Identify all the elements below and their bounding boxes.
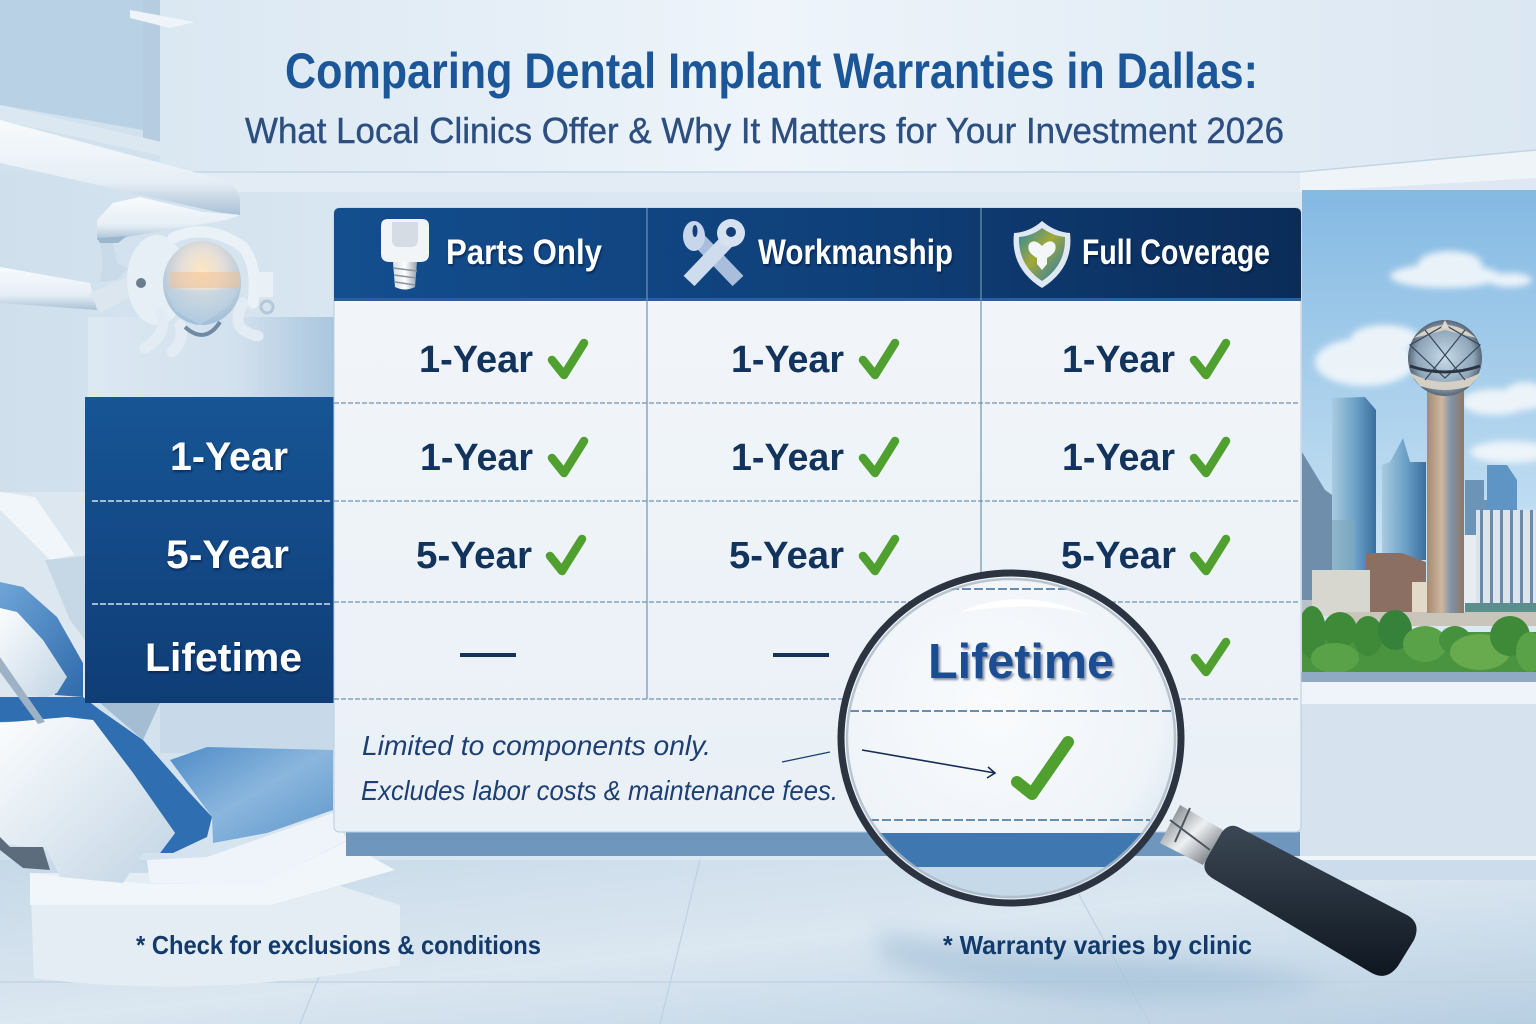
note: limited coverage: Limited to components only. xyxy=(362,730,711,761)
handle xyxy=(1160,805,1417,976)
arrow stub left of magnifier xyxy=(782,752,830,762)
dental lamp xyxy=(0,120,273,352)
lens label: Lifetime: Lifetime xyxy=(928,635,1114,689)
trees xyxy=(1298,606,1536,673)
window: Dallas skyline xyxy=(1298,190,1536,673)
note: limited coverage: Excludes labor costs & maintenance fees. xyxy=(361,775,838,806)
row 2: Workmanship value: 1-Year xyxy=(731,437,844,479)
row 3: Full Coverage value xyxy=(1061,535,1226,577)
column header: Full Coverage xyxy=(1014,221,1270,288)
column header: Parts Only: Parts Only xyxy=(446,233,602,272)
row 3: Parts Only value: 5-Year xyxy=(416,535,532,577)
row 1: Full Coverage value: 1-Year xyxy=(1062,339,1175,381)
row 1: Parts Only value: 1-Year xyxy=(419,339,533,381)
row 2: Full Coverage value xyxy=(1062,437,1226,479)
row 1: Parts Only value xyxy=(419,339,584,381)
column header: Full Coverage: Full Coverage xyxy=(1082,233,1270,272)
icon: shield xyxy=(1014,221,1070,288)
window sill and lower wall xyxy=(1300,672,1536,880)
comparison table xyxy=(334,208,1301,832)
clouds xyxy=(1315,251,1536,463)
row 2: Full Coverage value: 1-Year xyxy=(1062,437,1175,479)
left label: 5-Year: 5-Year xyxy=(166,533,289,577)
row 4: Workmanship dash xyxy=(773,653,829,657)
magnifying glass xyxy=(245,43,1417,976)
row 4: Parts Only dash xyxy=(460,653,516,657)
footnote: warranty varies: * Warranty varies by clinic xyxy=(943,930,1252,960)
footnote: exclusions: * Check for exclusions & conditions xyxy=(136,930,541,960)
dental chair xyxy=(0,492,400,986)
row 2: Parts Only value xyxy=(420,437,584,479)
icon: crossed wrenches xyxy=(683,219,745,281)
row 3: Workmanship value xyxy=(729,535,895,577)
lens xyxy=(830,573,1190,907)
row 3: Full Coverage value: 5-Year xyxy=(1061,535,1176,577)
note: limited coverage xyxy=(361,730,838,806)
subtitle: What Local Clinics Offer & Why It Matters for Your Investment 2026 xyxy=(245,110,1284,151)
row 2: Parts Only value: 1-Year xyxy=(420,437,533,479)
row 3: Workmanship value: 5-Year xyxy=(729,535,844,577)
icon: dental implant xyxy=(381,219,429,290)
column header: Workmanship xyxy=(683,219,953,281)
row 4: Full Coverage check xyxy=(1195,642,1226,672)
row 1: Workmanship value: 1-Year xyxy=(731,339,844,381)
row 3: Parts Only value xyxy=(416,535,582,577)
row 1: Full Coverage value xyxy=(1062,339,1226,381)
left label: Lifetime: Lifetime xyxy=(145,636,302,680)
row 1: Workmanship value xyxy=(731,339,895,381)
column header: Parts Only xyxy=(381,219,602,290)
Reunion Tower xyxy=(1408,320,1482,613)
panel shadow base xyxy=(346,832,1300,856)
title: Comparing Dental Implant Warranties in Dallas: xyxy=(285,43,1258,99)
column header: Workmanship: Workmanship xyxy=(758,233,953,272)
left row labels panel xyxy=(85,397,334,703)
row 2: Workmanship value xyxy=(731,437,895,479)
left label: 1-Year: 1-Year xyxy=(170,435,288,479)
lens arrow xyxy=(862,750,995,778)
lens check xyxy=(1017,742,1068,794)
distant towers xyxy=(1302,397,1536,626)
